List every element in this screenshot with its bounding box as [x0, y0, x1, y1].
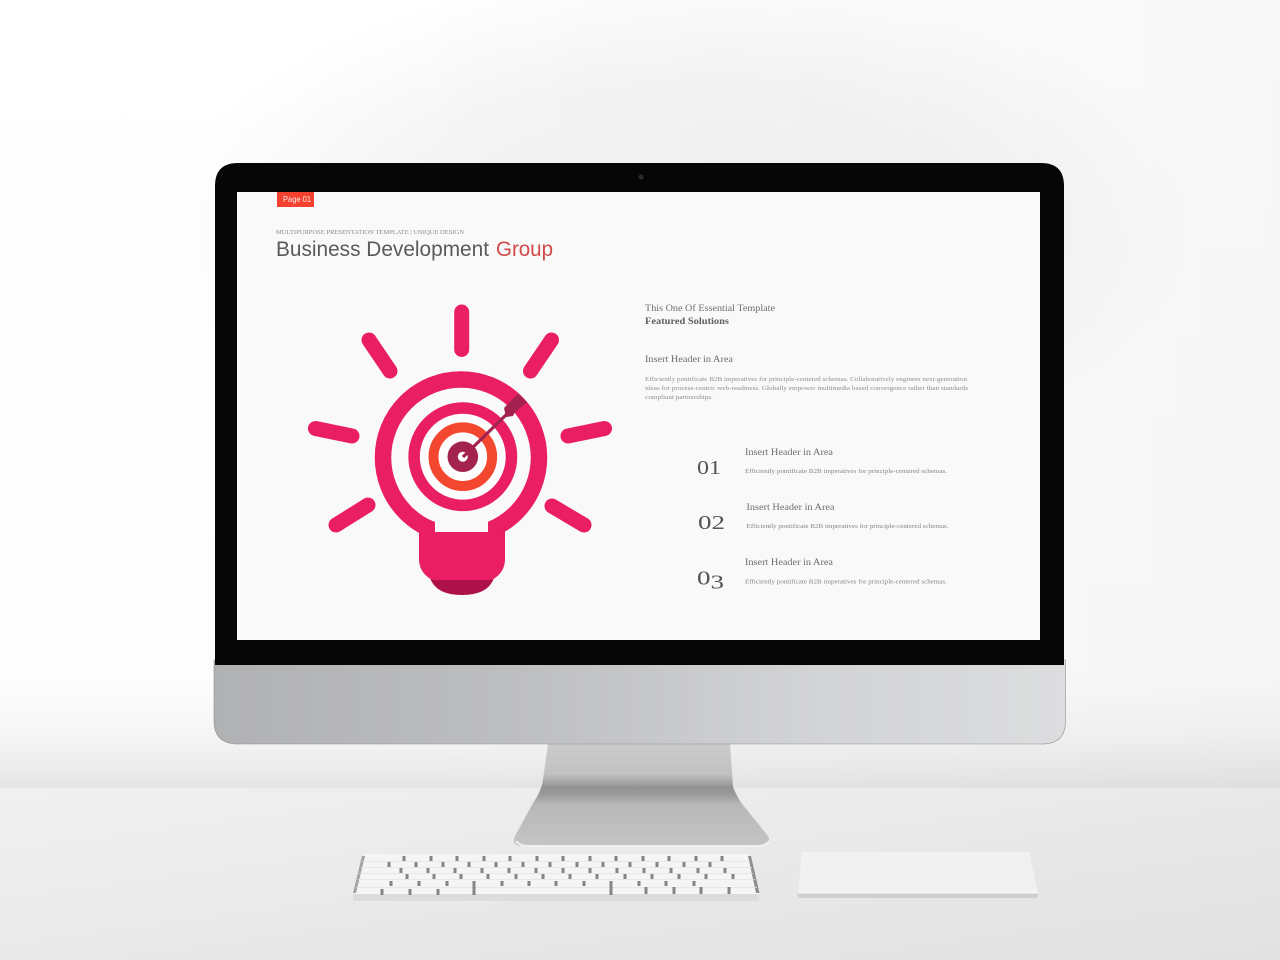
trackpad: [797, 852, 1038, 898]
page tag: [277, 192, 314, 207]
list item 01: [697, 448, 948, 479]
bulb ring: [383, 380, 539, 536]
intro text block: ideas for process-centric web-readiness. Globally empower multimedia based convergence rather than standards: [645, 385, 969, 392]
list item 03: 3: [710, 572, 724, 594]
monitor chin: [214, 660, 1066, 744]
bulb neck opening: [435, 518, 488, 532]
target centre: [448, 441, 478, 472]
intro heading: [645, 303, 775, 327]
monitor stand: [514, 743, 769, 846]
target outer ring: [414, 408, 511, 505]
list item 02: Efficiently pontificate B2B imperatives for principle-centered schemas.: [746, 523, 949, 530]
list item 01: Efficiently pontificate B2B imperatives for principle-centered schemas.: [745, 468, 948, 475]
intro heading: This One Of Essential Template: [645, 303, 775, 314]
list item 03: 0: [697, 568, 707, 590]
list item 02: [698, 503, 949, 534]
title: Group: [496, 237, 553, 261]
intro text block: Insert Header in Area: [645, 355, 734, 365]
bulb cap: [430, 578, 494, 595]
target orange ring: [434, 427, 492, 486]
intro text block: Efficiently pontificate B2B imperatives for principle-centered schemas. Collaboratively engineer next-generation: [645, 376, 967, 383]
light rays: [316, 312, 604, 525]
bulb base: [419, 528, 505, 580]
eyebrow text: MULTIPURPOSE PRESENTATION TEMPLATE | UNIQUE DESIGN: [276, 229, 465, 236]
list item 03: [697, 558, 948, 594]
dart: [463, 394, 527, 457]
slide screen: [237, 192, 1040, 640]
list item 01: Insert Header in Area: [745, 448, 834, 458]
intro text block: compliant partnerships.: [645, 394, 714, 401]
icon: light bulb with target and dart: [316, 312, 604, 595]
list item 03: Insert Header in Area: [745, 558, 834, 568]
background: desk: [0, 788, 1280, 960]
intro heading: Featured Solutions: [645, 317, 729, 327]
list item 01: 01: [697, 458, 721, 479]
list item 03: Efficiently pontificate B2B imperatives for principle-centered schemas.: [745, 578, 948, 586]
intro text block: [645, 355, 969, 401]
monitor: [214, 163, 1066, 744]
keyboard: [353, 854, 760, 901]
page tag: Page 01: [283, 195, 312, 204]
bulb neck shoulders: [388, 503, 534, 530]
camera: [638, 174, 644, 180]
list item 02: 02: [698, 513, 725, 534]
monitor bezel: [215, 163, 1064, 665]
title: Business Development: [276, 237, 489, 261]
list item 02: Insert Header in Area: [746, 503, 835, 513]
